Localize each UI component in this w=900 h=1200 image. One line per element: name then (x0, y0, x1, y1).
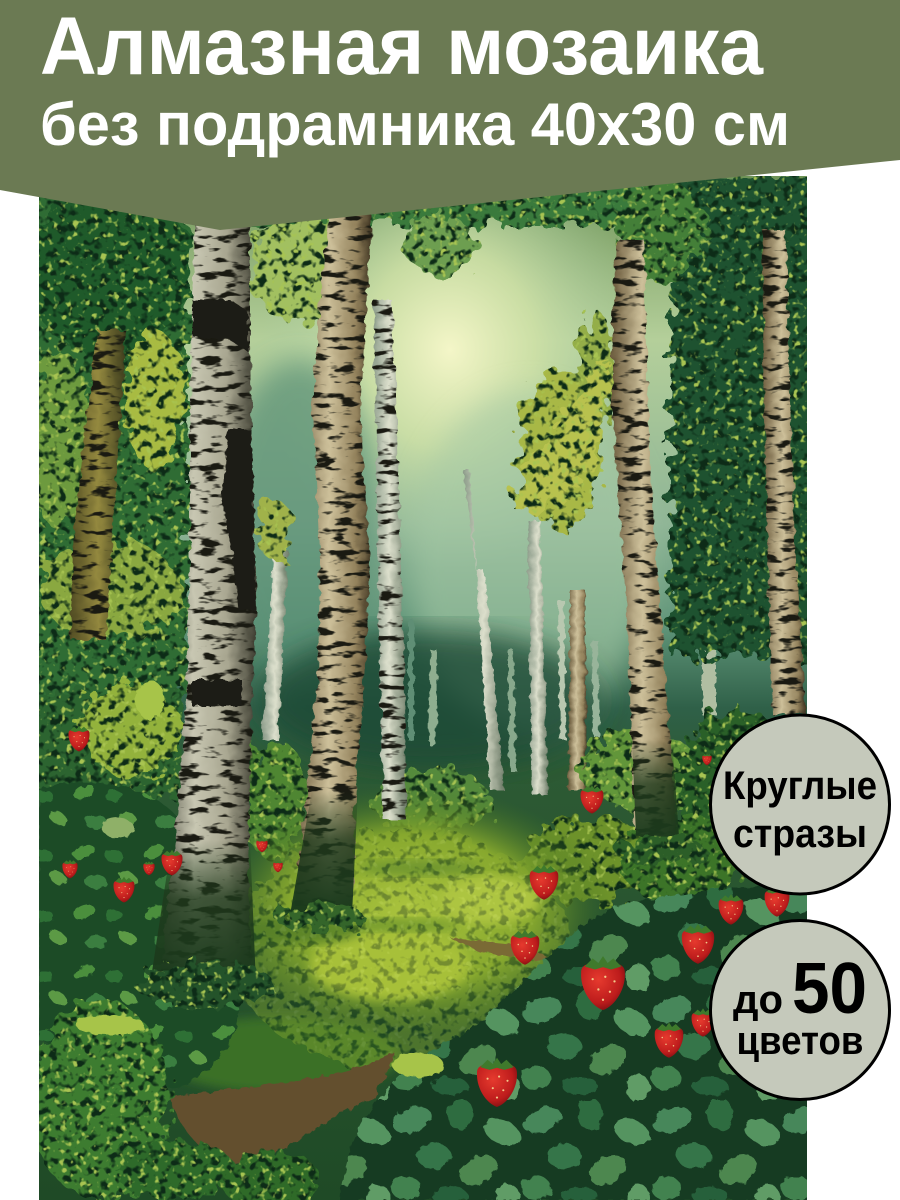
badge: up to 50 colors: 50 (792, 949, 867, 1029)
painting: sky and distant forest (39, 130, 807, 1200)
painting: bright leaves near berries (76, 680, 444, 1077)
painting: strawberry leaves (340, 886, 815, 1200)
badge: up to 50 colors: цветов (736, 1019, 864, 1063)
painting: far right trunk (762, 230, 806, 715)
painting: left back trunk (70, 330, 126, 640)
painting: large central birch trunk (294, 208, 372, 905)
painting: thin birch trunk (373, 300, 406, 820)
badge: round rhinestones: Круглые (723, 764, 877, 808)
painting: strawberries (62, 726, 789, 1107)
painting: dirt path (170, 938, 560, 1165)
badge: round rhinestones: стразы (733, 812, 867, 856)
title: Алмазная мозаика (40, 1, 764, 92)
painting: undergrowth foliage (30, 685, 805, 905)
painting: right trunk dark base (632, 743, 679, 844)
painting: sunlit grass path (190, 790, 601, 1090)
badge: round rhinestones (710, 715, 890, 894)
badge: up to 50 colors: до (733, 978, 783, 1022)
subtitle: без подрамника 40х30 см (40, 91, 790, 158)
painting: fern corner (30, 1000, 320, 1200)
forest painting (20, 130, 820, 1200)
painting: distant birch trunks (262, 470, 716, 795)
painting: grass around trunk roots (135, 836, 705, 1007)
painting: grass texture (230, 830, 570, 1070)
header banner (0, 0, 900, 230)
painting: left trunk dark patches (192, 300, 256, 706)
painting: hanging yellow branch (510, 360, 610, 511)
painting: left trunk moss base (152, 844, 256, 972)
painting: large left birch trunk (160, 225, 256, 975)
painting: large right birch trunk (612, 240, 678, 845)
painting: left undergrowth (39, 782, 238, 1088)
painting: canopy foliage (20, 176, 820, 690)
badge: up to 50 colors (710, 920, 890, 1100)
painting: central trunk moss base (290, 790, 358, 915)
